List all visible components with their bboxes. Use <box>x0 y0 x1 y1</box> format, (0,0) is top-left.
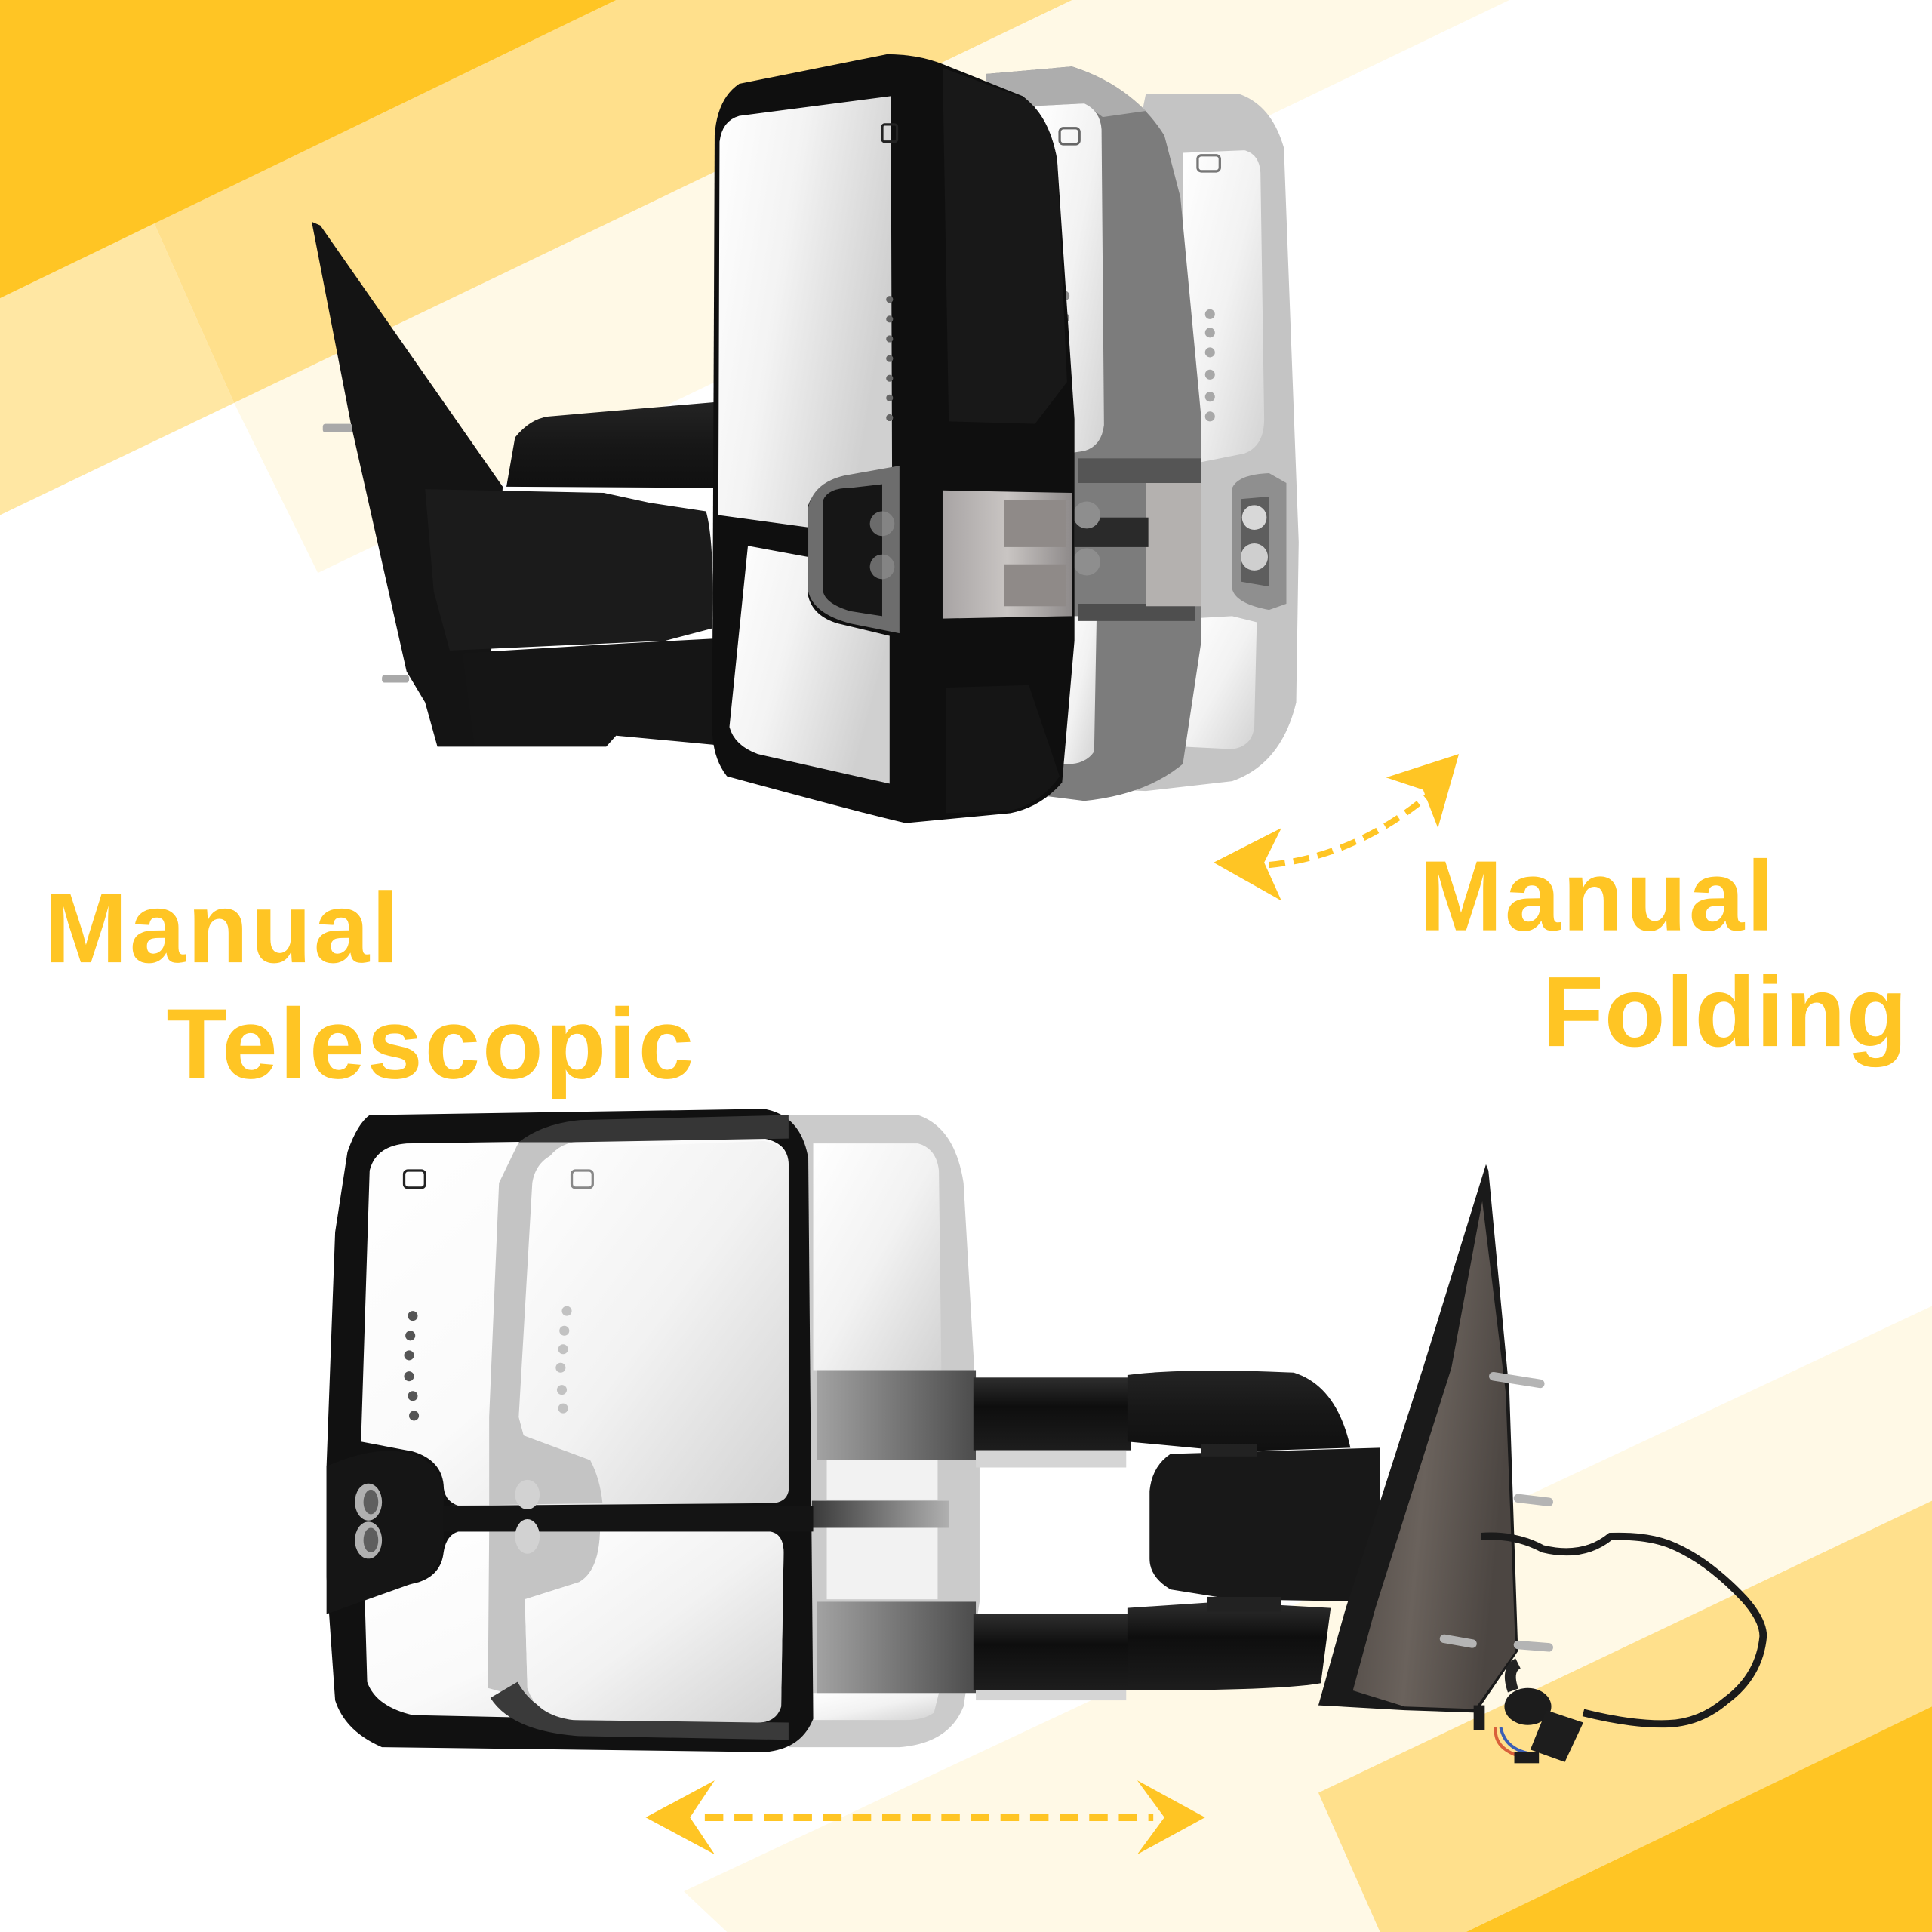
main lower glass <box>365 1531 783 1722</box>
heater icon <box>882 125 897 142</box>
mirror horizontal divider <box>444 1506 814 1531</box>
wiring harness <box>1481 1536 1763 1724</box>
base housing <box>1149 1447 1380 1601</box>
spotter lamp recess <box>823 485 882 616</box>
extended ghost mirror <box>789 1115 980 1747</box>
spotter lamps <box>355 1484 382 1558</box>
heading: manual telescopic: Telescopic <box>166 989 694 1100</box>
clear turn signal lens <box>943 491 1072 619</box>
mounting studs <box>1444 1377 1549 1647</box>
arrow: folding direction <box>1214 754 1459 900</box>
ghost upper glass <box>518 1141 789 1503</box>
product photo: telescopic mirror <box>327 1109 1763 1763</box>
ghost spotter lamps <box>515 1480 540 1554</box>
main upper glass <box>361 1139 789 1506</box>
heading: manual telescopic: Manual <box>45 872 399 984</box>
upper arm <box>506 401 721 488</box>
upper telescoping tube <box>974 1377 1131 1451</box>
ghost frame over black rim <box>518 1115 789 1142</box>
heading: manual folding <box>1420 841 1907 1068</box>
ghost upper arm <box>817 1371 976 1460</box>
mounting sail <box>312 222 503 746</box>
central ghost mirror overlay <box>444 1115 789 1740</box>
LED signal dots, ghost <box>555 1306 572 1414</box>
upper elbow <box>1128 1371 1350 1451</box>
ghost lower glass <box>525 1531 783 1722</box>
heading: manual folding: Folding <box>1543 956 1907 1068</box>
LED signal dots, main <box>405 1311 419 1420</box>
background: top-left yellow bands <box>0 0 1509 573</box>
ghost lower arm <box>817 1601 976 1693</box>
mirror lower shell <box>946 685 1060 814</box>
heater icons <box>405 1171 592 1188</box>
mounting sail with back plate <box>1318 1164 1518 1712</box>
wire connector <box>1474 1663 1583 1763</box>
base housing <box>425 489 712 651</box>
ghost lower bracket <box>488 1531 616 1722</box>
spotter bezel <box>808 466 900 633</box>
heading: manual telescopic <box>45 872 694 1100</box>
ghost frame over lower rim <box>491 1682 789 1740</box>
main upper glass <box>718 96 892 528</box>
mirror back shell <box>943 68 1067 424</box>
spotter lamp housing <box>327 1451 444 1614</box>
product photo: folding mirror <box>312 54 1299 823</box>
main mirror frame <box>327 1109 814 1752</box>
near ghost mirror position <box>986 66 1201 801</box>
lower arm <box>462 638 721 746</box>
main lower glass <box>730 546 890 783</box>
LED signal dots <box>886 296 893 421</box>
lower telescoping tube <box>974 1614 1131 1690</box>
pivot posts <box>1201 1444 1281 1612</box>
heading: manual folding: Manual <box>1420 841 1774 952</box>
far ghost mirror position <box>1072 94 1299 791</box>
arrow: telescopic direction <box>646 1780 1205 1854</box>
background: bottom-right yellow bands <box>684 1306 1932 1932</box>
lower elbow <box>1128 1601 1331 1690</box>
main mirror body <box>712 54 1075 823</box>
ghost frame over upper glass <box>444 1142 602 1506</box>
mounting studs <box>323 424 409 682</box>
